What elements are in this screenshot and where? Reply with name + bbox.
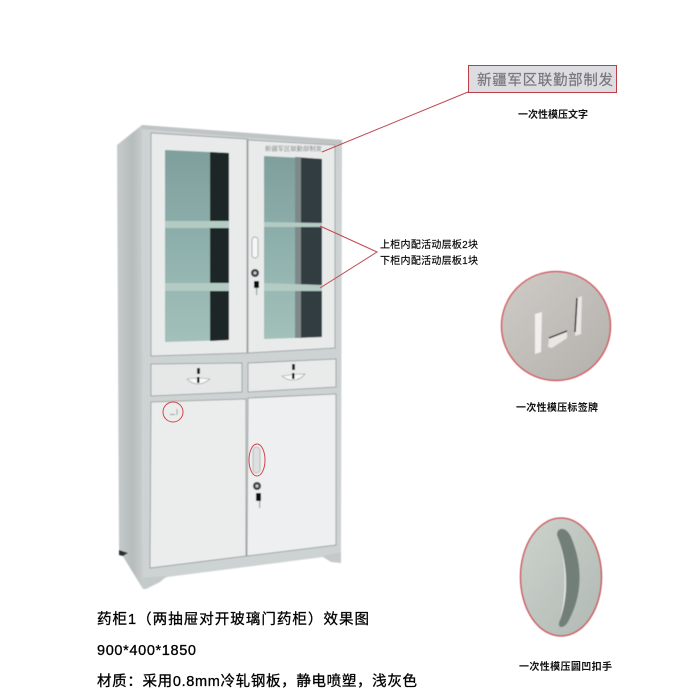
callout: embossed text sample: 新疆军区联勤部制发: [477, 72, 613, 89]
upper lock and key: [251, 269, 259, 295]
upper right glass door: [248, 140, 335, 353]
left drawer: [151, 363, 242, 396]
shelves note: 上柜内配活动层板2块: [380, 238, 478, 251]
highlight circle: label plate: [163, 402, 183, 422]
material: 材质：采用0.8mm冷轧钢板，静电喷塑，浅灰色: [97, 672, 417, 690]
cabinet body: [117, 125, 342, 589]
leader line: embossed text: [322, 92, 468, 152]
cabinet illustration: [117, 125, 342, 589]
product title: 药柜1（两抽屉对开玻璃门药柜）效果图: [97, 611, 369, 628]
embossed label mark: [170, 409, 177, 415]
detail oval: recessed handle: [520, 518, 602, 636]
lower handle: [253, 447, 260, 473]
shelves note: 下柜内配活动层板1块: [380, 254, 478, 267]
embossed door text: 新疆军区联勤部制发: [265, 145, 322, 153]
lower left door: [150, 399, 246, 568]
detail circle: label plate: [502, 272, 610, 380]
caption: embossed text: 一次性模压文字: [518, 108, 588, 121]
cabinet feet: [142, 552, 341, 589]
leader lines: shelves: [320, 226, 377, 288]
right drawer: [248, 359, 336, 392]
shelves note: [380, 238, 478, 267]
callout: embossed text sample: [468, 66, 616, 92]
dimensions: 900*400*1850: [97, 643, 196, 659]
upper handle: [252, 237, 258, 258]
lower right door: [247, 394, 336, 556]
lower lock and key: [253, 482, 261, 508]
highlight oval: door handle: [249, 444, 265, 476]
caption: recessed handle: 一次性模压圆凹扣手: [519, 660, 612, 673]
caption: label plate: 一次性模压标签牌: [516, 401, 598, 414]
upper left glass door: [151, 133, 247, 356]
